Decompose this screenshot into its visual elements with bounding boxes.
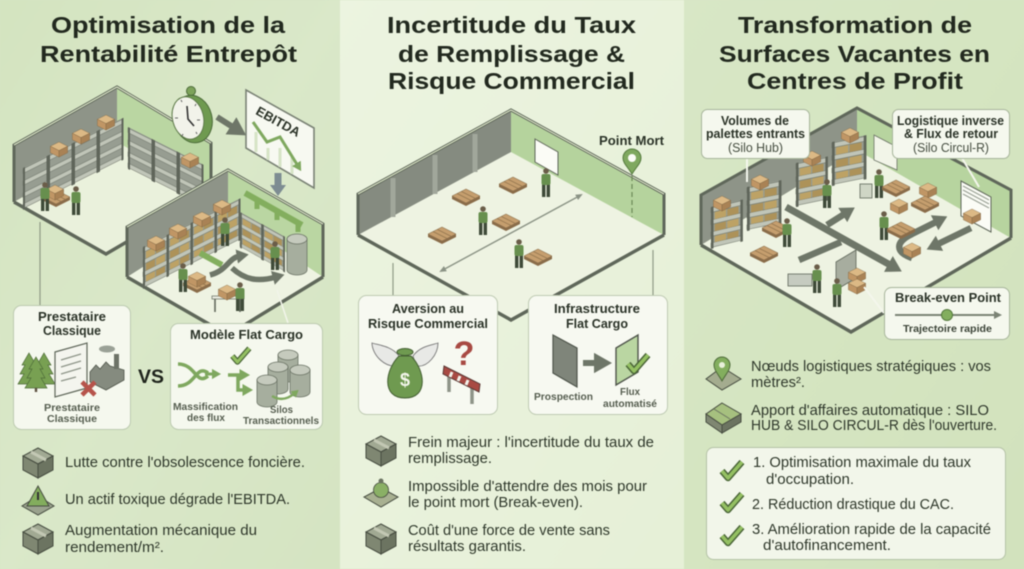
icon: box xyxy=(366,524,396,554)
title: left column: Optimisation de la xyxy=(51,12,285,38)
card: benefits checklist: d'autofinancement. xyxy=(763,538,891,554)
card: Prestataire Classique: Prestataire xyxy=(38,310,106,324)
bullet list: left column: Un actif toxique dégrade l'EBITDA. xyxy=(65,492,290,508)
bullet list: middle column: Frein majeur : l'incertitude du taux de xyxy=(408,435,654,451)
card: benefits checklist: d'occupation. xyxy=(766,472,854,488)
label: VS: VS xyxy=(138,367,164,388)
bullet list: right column: mètres². xyxy=(751,375,805,391)
card: Infrastructure Flat Cargo: Infrastructure xyxy=(554,302,640,316)
card: benefits checklist xyxy=(706,448,1006,560)
illustration: Flat Cargo warehouse xyxy=(127,170,323,335)
connector: classic line xyxy=(39,222,41,305)
icon: box xyxy=(23,524,53,554)
bullet list: left column: rendement/m². xyxy=(65,540,164,556)
card: benefits checklist: 3. Amélioration rapide de la capacité xyxy=(752,522,991,538)
panel: left background xyxy=(0,0,340,569)
card: Infrastructure Flat Cargo xyxy=(528,296,668,414)
icon: check 1 xyxy=(722,462,742,478)
bullet list: left column: Lutte contre l'obsolescence foncière. xyxy=(65,455,305,471)
connector: Break-even pointer xyxy=(864,287,884,313)
card: Modèle Flat Cargo: des flux xyxy=(187,412,225,424)
card: Infrastructure Flat Cargo: automatisé xyxy=(603,398,657,410)
card: Prestataire Classique xyxy=(14,306,130,430)
title: middle column xyxy=(387,12,636,94)
chart: EBITDA sign: EBITDA xyxy=(253,103,304,140)
card: Infrastructure Flat Cargo: Prospection xyxy=(534,391,593,403)
arrow: EBITDA down xyxy=(274,173,282,187)
bullet list: middle column: Coût d'une force de vente sans xyxy=(408,523,610,539)
icon: box xyxy=(366,436,396,466)
icon: check 2 xyxy=(722,494,742,510)
callout: Silo Circul-R: & Flux de retour xyxy=(904,127,998,141)
icon: routed arrows xyxy=(228,375,246,390)
double arrow xyxy=(441,195,581,271)
icon: stopwatch xyxy=(168,86,217,147)
bullet list: middle column: Impossible d'attendre des mois pour xyxy=(408,479,647,495)
title: left column xyxy=(40,12,297,67)
arrow: door to door xyxy=(583,360,600,366)
icon: merging flows xyxy=(178,364,215,386)
icon: check xyxy=(232,348,249,362)
bullet list: middle column xyxy=(364,435,654,555)
arrow: stopwatch to EBITDA xyxy=(217,117,236,129)
card: Modèle Flat Cargo: Silos xyxy=(270,404,293,416)
illustration: empty warehouse xyxy=(358,110,664,320)
title: right column: Transformation de xyxy=(738,12,972,38)
callout: Silo Hub xyxy=(702,110,810,158)
card: Modèle Flat Cargo: Massification xyxy=(173,401,238,413)
icon: boxes xyxy=(706,403,741,433)
title: middle column: Risque Commercial xyxy=(388,68,635,94)
title: right column xyxy=(719,12,990,94)
illustration: classic warehouse xyxy=(14,87,211,254)
callout: Silo Hub: (Silo Hub) xyxy=(728,141,783,155)
icon: box xyxy=(23,448,53,478)
bullet list: middle column: le point mort (Break-even). xyxy=(408,495,583,511)
title: right column: Centres de Profit xyxy=(747,68,963,94)
bullet list: middle column: remplissage. xyxy=(408,451,492,467)
connector: risk line xyxy=(392,263,394,295)
panel: middle background xyxy=(340,0,684,569)
title: left column: Rentabilité Entrepôt xyxy=(40,41,297,67)
card: Modèle Flat Cargo: Transactionnels xyxy=(243,415,319,427)
card: Aversion au Risque Commercial: Risque Commercial xyxy=(368,317,488,331)
card: Modèle Flat Cargo xyxy=(170,324,322,430)
icon: location node xyxy=(706,357,741,390)
card: Modèle Flat Cargo: Modèle Flat Cargo xyxy=(190,328,303,342)
bullet list: left column xyxy=(22,448,305,556)
connector: Silo Circul-R pointer xyxy=(962,158,979,187)
callout: Silo Circul-R: Logistique inverse xyxy=(897,114,1004,128)
card: Prestataire Classique: Classique xyxy=(47,413,97,425)
bullet list: right column: HUB & SILO CIRCUL-R dès l'ouverture. xyxy=(751,418,997,434)
title: right column: Surfaces Vacantes en xyxy=(719,41,990,67)
icon: question mark: ? xyxy=(454,335,474,373)
card: Infrastructure Flat Cargo: Flat Cargo xyxy=(566,317,628,331)
callout: Break-even Point: Trajectoire rapide xyxy=(903,323,992,335)
bullet list: right column: Apport d'affaires automatique : SILO xyxy=(751,403,989,419)
card: Infrastructure Flat Cargo: Flux xyxy=(620,386,640,398)
connector: Silo Hub pointer xyxy=(746,158,748,182)
icon: barrier xyxy=(443,366,480,404)
icon: trees xyxy=(18,353,55,392)
label: Point Mort: Point Mort xyxy=(599,134,665,148)
icon: flying money bag: $ xyxy=(400,370,410,390)
card: Aversion au Risque Commercial: Aversion au xyxy=(392,302,464,316)
bullet list: left column: Augmentation mécanique du xyxy=(65,523,257,539)
card: Aversion au Risque Commercial xyxy=(358,296,498,414)
bullet list: right column: Nœuds logistiques stratégiques : vos xyxy=(751,359,991,375)
icon: document xyxy=(55,343,87,397)
icon: map pin xyxy=(623,149,641,174)
connector: infrastructure line xyxy=(652,250,654,295)
icon: weight xyxy=(364,478,398,507)
callout: Silo Hub: palettes entrants xyxy=(706,127,805,141)
icon: factory xyxy=(90,346,124,390)
icon: check xyxy=(628,355,648,371)
title: middle column: de Remplissage & xyxy=(398,41,625,67)
icon: open door xyxy=(616,335,638,385)
label: Point Mort xyxy=(599,134,665,174)
callout: Break-even Point xyxy=(884,288,1010,340)
title: middle column: Incertitude du Taux xyxy=(387,12,636,38)
callout: Silo Hub: Volumes de xyxy=(721,114,789,128)
icon: silos xyxy=(257,350,310,407)
icon: check 3 xyxy=(722,527,742,543)
callout: Break-even Point: Break-even Point xyxy=(895,291,1002,305)
chart: EBITDA sign xyxy=(246,90,314,188)
icon: closed door xyxy=(553,335,577,387)
callout: Silo Circul-R: (Silo Circul-R) xyxy=(913,141,989,155)
bullet list: right column xyxy=(706,357,997,434)
card: benefits checklist: 2. Réduction drastique du CAC. xyxy=(752,497,954,513)
card: Prestataire Classique: Classique xyxy=(43,324,101,338)
icon: warning xyxy=(22,486,54,515)
connector: Flat Cargo line xyxy=(277,290,288,323)
callout: Silo Circul-R xyxy=(892,110,1010,158)
card: benefits checklist: 1. Optimisation maximale du taux xyxy=(753,455,972,471)
icon: red cross xyxy=(82,382,95,395)
panel: right background xyxy=(684,0,1024,569)
illustration: active warehouse xyxy=(701,108,1011,332)
card: Prestataire Classique: Prestataire xyxy=(44,402,100,414)
bullet list: middle column: résultats garantis. xyxy=(408,539,526,555)
